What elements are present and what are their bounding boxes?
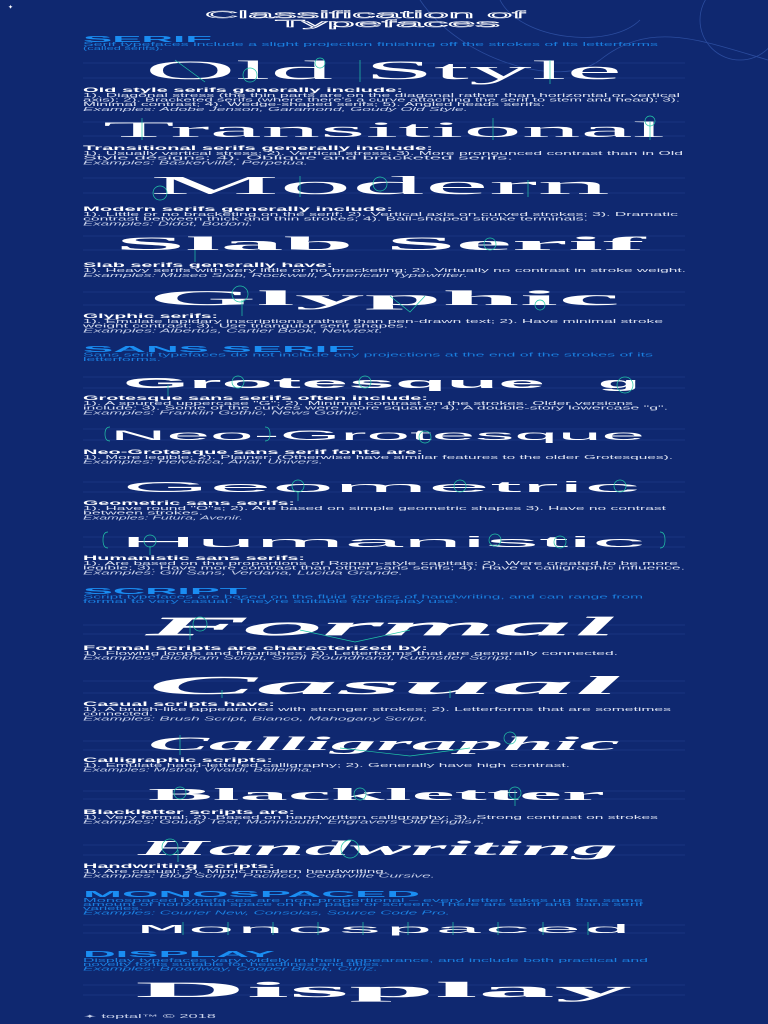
text: glyphic: weight contrast; 3). Use triangular serif shapes. <box>83 324 408 330</box>
text: neo-grotesque <box>83 450 673 466</box>
text: old style: Minimal contrast; 4). Wedge-shaped serifs; 5). Angled heads serifs. <box>83 102 545 108</box>
section: display: novelty fonts suitable for headlines and titles. <box>83 962 384 968</box>
text: grotesque: Grotesque sans serifs often include: <box>83 396 428 402</box>
specimen: Geometric <box>122 479 644 501</box>
text: humanistic <box>83 556 685 576</box>
text: calligraphic: Examples: Mistral, Vivaldi, Ballerina. <box>83 768 313 774</box>
text: calligraphic: 1). Emulate hand-lettered calligraphy; 2). Generally have high contrast. <box>83 763 570 769</box>
specimen: Grotesque: g <box>598 375 640 392</box>
specimen: Calligraphic <box>148 732 623 756</box>
section: sans serif: letterforms. <box>83 357 162 363</box>
specimen: Grotesque <box>123 375 640 396</box>
specimen: Neo-Grotesque: Neo-Grotesque <box>110 427 646 443</box>
section: monospaced: amount of horizontal space on the page or screen. There are serif and sans serif <box>83 902 644 908</box>
logo: ✦ <box>8 4 13 11</box>
text: glyphic: Examples: Albertus, Cartier Book, Newtext. <box>83 328 383 334</box>
specimen: Monospaced: Monospaced <box>137 923 632 937</box>
section: script: Script typefaces are based on the fluid strokes of handwriting, and can range from <box>83 594 644 600</box>
text: old style: Old style serifs generally include: <box>83 88 403 94</box>
text: old style: 1). Diagonal stress (the thin parts are on the diagonal rather than horizontal or vertical <box>83 93 680 99</box>
specimen: Humanistic <box>103 532 665 555</box>
specimen: Display: Display <box>135 977 632 1002</box>
specimen: Glyphic <box>148 286 620 316</box>
section: script <box>83 587 644 605</box>
text: casual: Casual scripts have: <box>83 702 275 708</box>
specimen: Slab Serif: Slab Serif <box>115 234 649 255</box>
text: grotesque: include: 3). Some of the curves were more square; 4). A double-story lowercase "g". <box>83 406 668 412</box>
text: glyphic: 1). Emulate lapidary inscriptions rather than pen-drawn text; 2). Have minimal stroke <box>83 319 663 325</box>
section: sans serif: Sans serif typefaces do not include any projections at the end of the strokes of its <box>83 352 654 358</box>
section: display: DISPLAY <box>83 950 279 959</box>
text: transitional: 1). Usually vertical stress; 2). Vertical stress; 3). More pronounced contrast than in Old <box>83 151 683 157</box>
text: handwriting: 1). Are casual; 2). Mimic modern handwriting. <box>83 869 388 875</box>
specimen: Humanistic: Humanistic <box>120 534 649 551</box>
text: modern <box>83 207 679 228</box>
specimen: Modern <box>150 171 610 200</box>
text: old style <box>83 88 680 113</box>
text: calligraphic <box>83 758 570 774</box>
specimen: Blackletter: Blackletter <box>148 785 608 804</box>
text: geometric <box>83 501 668 522</box>
text: casual: connected. <box>83 712 153 718</box>
text: glyphic <box>83 314 663 334</box>
text: geometric: 1). Have round "O"s; 2). Are based on simple geometric shapes 3). Have no contrast <box>83 506 668 512</box>
title <box>205 10 526 30</box>
text: neo-grotesque: 1). More legible; 2). Plainer; (Otherwise have similar features to the older Grotesques). <box>83 455 673 461</box>
specimen: Geometric: Geometric <box>122 479 644 496</box>
section: display <box>83 950 648 972</box>
text: transitional: Transitional serifs generally include: <box>83 146 433 152</box>
text: old style: axis); 2). Bracketed serifs (where there's a curve attaching the serif to stem and head); 3). <box>83 98 680 104</box>
section: serif: (called serifs). <box>83 46 164 52</box>
text: blackletter: 1). Very formal; 2). Based on handwritten calligraphy; 3). Strong contrast on strokes <box>83 815 659 821</box>
section: script: formal to very casual. They're suitable for display use. <box>83 599 459 605</box>
title: Classification of <box>205 10 526 21</box>
section: display: Examples: Broadway, Cooper Black, Curlz. <box>83 966 378 972</box>
section: monospaced: Monospaced typefaces are non-proportional – every letter takes up the same <box>83 898 643 904</box>
specimen: Formal <box>142 612 615 642</box>
specimen: Glyphic: Glyphic <box>148 286 620 310</box>
text: humanistic: legible; 3). Have more contrast than other sans serifs; 4). Have a calligraphic influence. <box>83 566 685 572</box>
text: glyphic: Glyphic serifs: <box>83 314 218 320</box>
section: sans serif: SANS SERIF <box>83 345 356 354</box>
section: monospaced: Examples: Courier New, Consolas, Source Code Pro. <box>83 910 450 916</box>
text: casual <box>83 702 672 722</box>
specimen: Blackletter <box>148 785 608 806</box>
text: grotesque: 1). A spurred uppercase "G"; 2). Minimal contrast on the strokes. Older versions <box>83 401 634 407</box>
text: humanistic: Humanistic sans serifs: <box>83 556 305 562</box>
text: handwriting <box>83 864 435 880</box>
specimen: Handwriting <box>134 836 618 862</box>
text: old style: Examples: Adobe Jenson, Garamond, Goudy Old Style. <box>83 107 468 113</box>
text: geometric: Geometric sans serifs: <box>83 501 295 507</box>
text: formal <box>83 646 618 662</box>
text: grotesque <box>83 396 668 416</box>
text: transitional: Style designs; 4). Oblique and bracketed serifs. <box>83 156 513 162</box>
specimen: Neo-Grotesque <box>105 427 646 443</box>
specimen: Formal: Formal <box>142 612 615 641</box>
section: serif <box>83 35 659 52</box>
text: grotesque: Examples: Franklin Gothic, News Gothic. <box>83 410 363 416</box>
text: calligraphic: Calligraphic scripts: <box>83 758 273 764</box>
text: modern: contrast between thick and thin strokes; 4). Ball-shaped stroke terminals. <box>83 216 588 222</box>
text: humanistic: Examples: Gill Sans, Verdana, Lucida Grande. <box>83 570 403 576</box>
section: monospaced <box>83 890 644 916</box>
section: sans serif <box>83 345 654 363</box>
section: script: SCRIPT <box>83 587 248 596</box>
specimen: Grotesque: Grotesque <box>123 375 545 392</box>
text: slab: 1). Heavy serifs with very little or no bracketing; 2). Virtually no contrast in stroke weight. <box>83 268 686 274</box>
footer: ✦ toptal™ © 2018 <box>83 1013 217 1020</box>
title: Typefaces <box>275 19 500 30</box>
text: formal: Examples: Bickham Script, Snell Roundhand, Kuenstler Script. <box>83 656 513 662</box>
section: monospaced: varieties. <box>83 906 144 912</box>
decorative ampersand outline <box>420 0 768 72</box>
specimen: Transitional: Transitional <box>103 117 665 142</box>
section: serif: Serif typefaces include a slight projection finishing off the strokes of its letterforms <box>83 42 659 48</box>
specimen: Slab Serif <box>115 234 649 262</box>
text: geometric: between strokes. <box>83 510 203 516</box>
text: modern: Examples: Didot, Bodoni. <box>83 222 253 228</box>
section: serif: SERIF <box>83 35 213 44</box>
text: formal: Formal scripts are characterized by: <box>83 646 428 652</box>
text: transitional: Examples: Baskerville, Perpetua. <box>83 160 308 166</box>
specimen: Handwriting: Handwriting <box>134 836 618 860</box>
specimen: Old Style <box>145 56 622 85</box>
specimen: Modern: Modern <box>150 171 610 200</box>
text: formal: 1). Flowing loops and flourishes; 2). Letterforms that are generally connected. <box>83 651 618 657</box>
text: neo-grotesque: Neo-Grotesque sans serif fonts are: <box>83 450 423 456</box>
text: slab: Examples: Museo Slab, Rockwell, American Typewriter. <box>83 273 468 279</box>
text: casual: 1). A brush-like appearance with stronger strokes; 2). Letterforms that are sometimes <box>83 707 672 713</box>
text: blackletter: Examples: Goudy Text, Monmouth, Engravers Old English. <box>83 820 485 826</box>
specimen: Casual: Casual <box>148 671 625 700</box>
text: modern: Modern serifs generally include: <box>83 207 393 213</box>
section: monospaced: MONOSPACED <box>83 890 421 899</box>
text: blackletter: Blackletter scripts are: <box>83 810 295 816</box>
text: neo-grotesque: Examples: Helvetica, Arial, Univers. <box>83 460 323 466</box>
specimen: Old Style: Old Style <box>145 56 622 85</box>
text: transitional <box>83 146 683 166</box>
text: slab <box>83 263 686 279</box>
text: slab: Slab serifs generally have: <box>83 263 333 269</box>
text: handwriting: Handwriting scripts: <box>83 864 275 870</box>
section: display: Display typefaces vary widely in their appearance, and include both practical and <box>83 958 648 964</box>
text: blackletter <box>83 810 659 826</box>
specimen: Transitional <box>103 116 665 142</box>
text: casual: Examples: Brush Script, Bianco, Mahogany Script. <box>83 716 428 722</box>
text: humanistic: 1). Are based on the proportions of Roman-style capitals; 2). Were created to be more <box>83 561 678 567</box>
specimen: Calligraphic: Calligraphic <box>148 734 623 755</box>
text: modern: 1). Little or no bracketing on the serif; 2). Vertical axis on curved strokes; 3). Dramatic <box>83 212 679 218</box>
text: geometric: Examples: Futura, Avenir. <box>83 516 243 522</box>
text: handwriting: Examples: Blog Script, Pacifico, Cedarville Cursive. <box>83 874 435 880</box>
